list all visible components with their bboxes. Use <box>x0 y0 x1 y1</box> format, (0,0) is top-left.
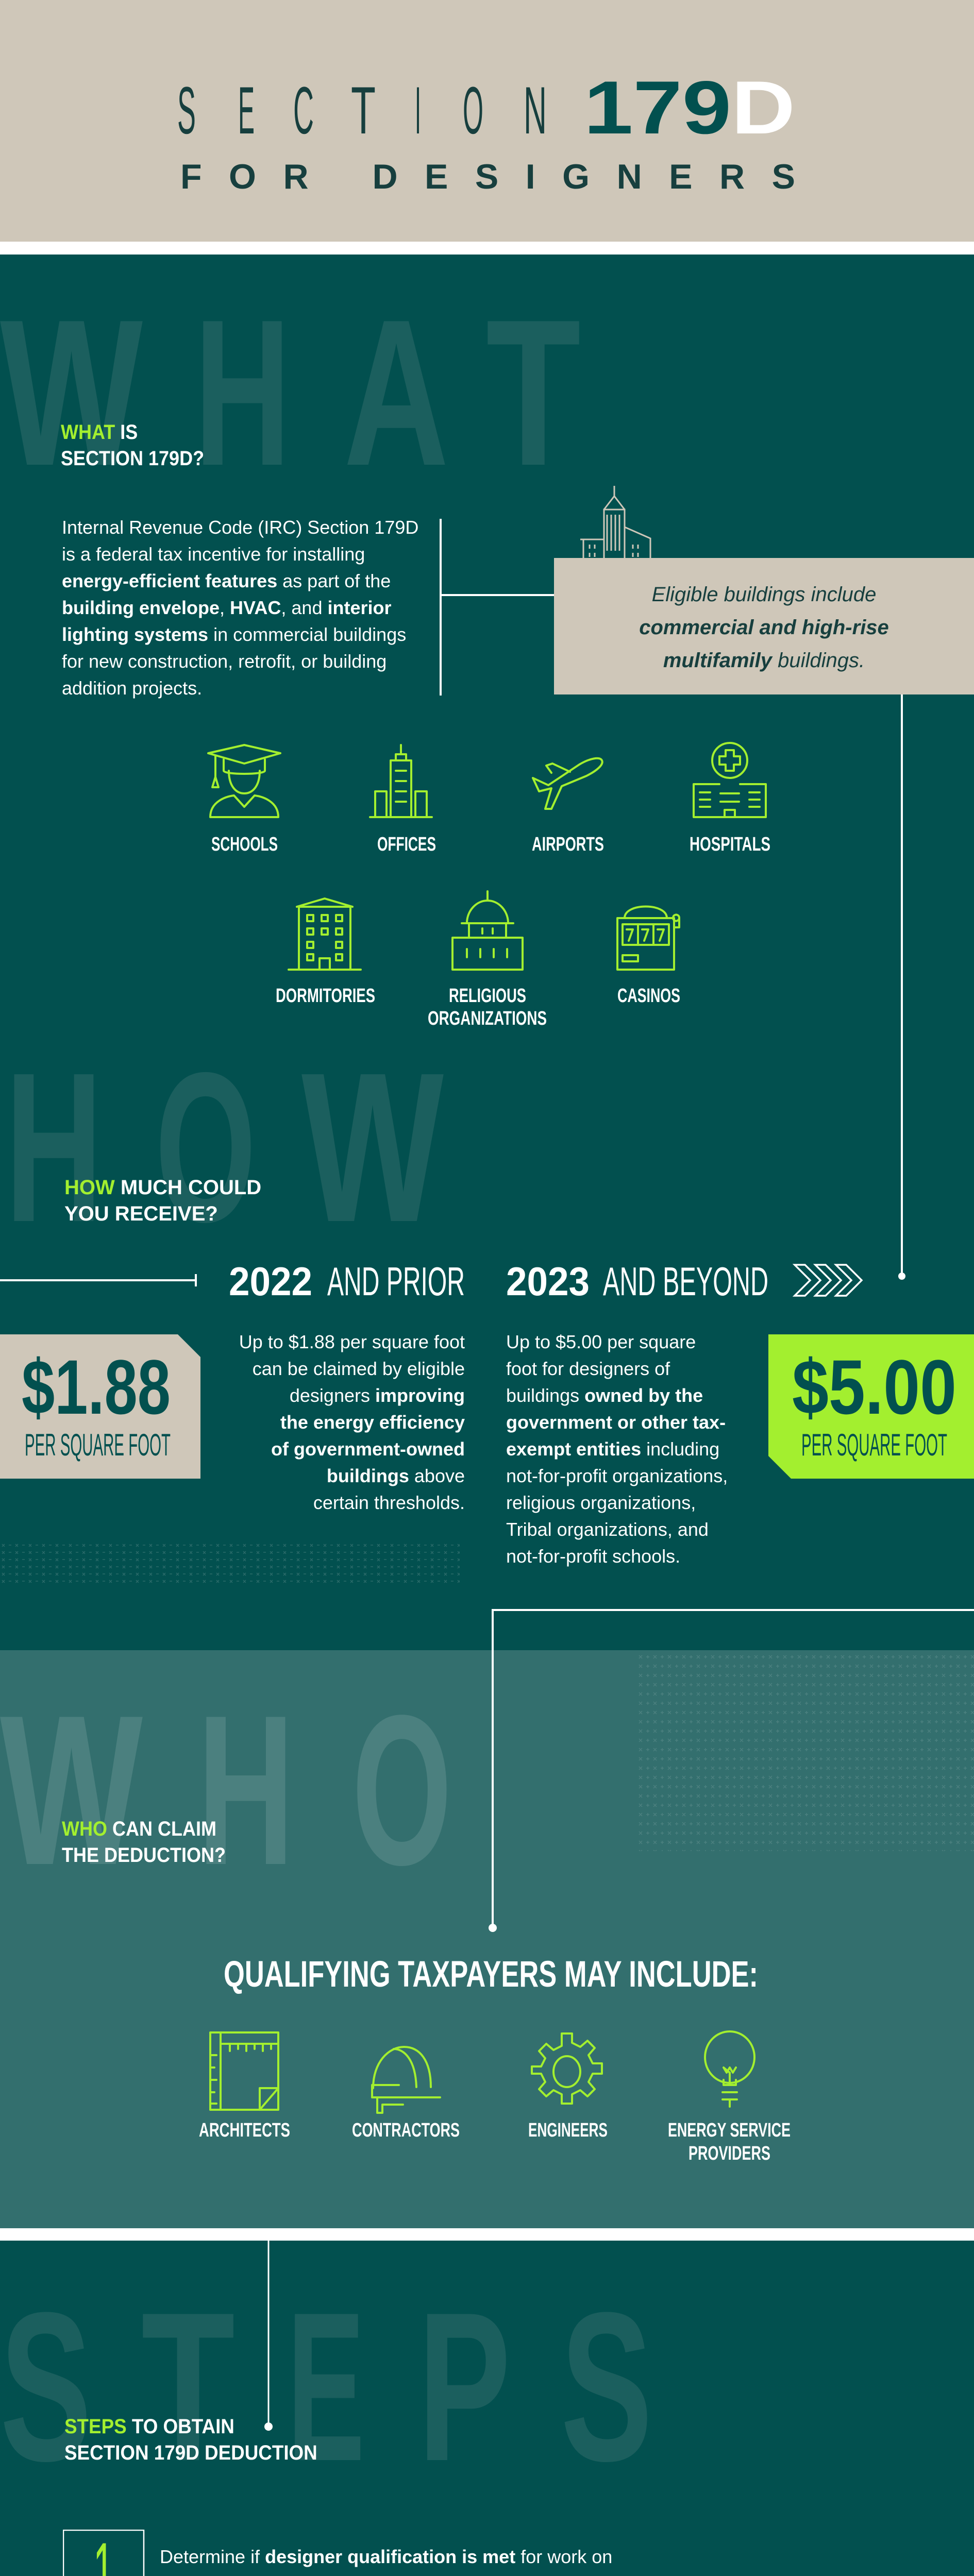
text: 2023 and beyond: not-for-profit organizations, <box>506 1465 728 1486</box>
icon: hospitals: HOSPITALS <box>690 834 770 855</box>
icon: hospitals <box>690 743 770 855</box>
title: E <box>238 73 255 148</box>
connector: how to who <box>489 1609 974 1932</box>
text: 2023 and beyond: government or other tax- <box>506 1412 726 1433</box>
text: what description <box>62 517 418 699</box>
icon: religious organizations: RELIGIOUS <box>449 985 526 1007</box>
text: 2022 and prior <box>239 1331 465 1513</box>
price tag: $5.00 <box>768 1334 974 1479</box>
icon: offices <box>370 745 436 855</box>
header band <box>0 0 974 242</box>
icon: airports <box>532 758 604 855</box>
icon: architects: ARCHITECTS <box>199 2120 290 2141</box>
timeline headings: 2022 and 2023: AND PRIOR <box>327 1259 465 1303</box>
icon: schools: SCHOOLS <box>211 834 278 855</box>
connector: who to steps <box>264 2241 273 2431</box>
text: 2022 and prior: can be claimed by eligible <box>253 1358 465 1379</box>
title: S <box>177 73 196 148</box>
pattern: how section dots <box>2 1544 460 1583</box>
heading: who can claim: THE DEDUCTION? <box>62 1844 226 1867</box>
icon: dormitories <box>276 899 375 1007</box>
heading: steps to obtain: STEPS TO OBTAIN <box>64 2415 234 2438</box>
text: 2023 and beyond: Up to $5.00 per square <box>506 1331 696 1352</box>
icon: engineers: ENGINEERS <box>528 2120 608 2141</box>
timeline headings: 2022 and 2023: 2023 <box>506 1259 590 1303</box>
icon grid: eligible building types <box>207 742 770 1029</box>
icon grid: taxpayers <box>199 2030 791 2164</box>
text: 2022 and prior: certain thresholds. <box>313 1492 465 1513</box>
title: FOR DESIGNERS <box>180 157 795 196</box>
timeline headings: 2022 and 2023: AND BEYOND <box>603 1259 768 1303</box>
text: 2022 and prior: the energy efficiency <box>280 1412 465 1433</box>
text: 2023 and beyond: religious organizations, <box>506 1492 696 1513</box>
connector lines: what to callout and down to how <box>440 519 905 1280</box>
heading: steps to obtain: SECTION 179D DEDUCTION <box>64 2442 317 2464</box>
text: what description: lighting systems in commercial buildings <box>62 624 406 645</box>
icon: airports: AIRPORTS <box>532 834 604 855</box>
watermark: WHO <box>0 1670 452 1872</box>
icon: contractors <box>352 2047 460 2141</box>
steps: numbered list <box>63 2530 612 2576</box>
heading: steps to obtain <box>64 2415 317 2464</box>
panel: who can claim <box>0 1650 974 2228</box>
heading: who can claim <box>62 1818 226 1867</box>
heading: how much could you receive <box>64 1176 261 1225</box>
icon: engineers <box>528 2033 608 2141</box>
step 1 <box>63 2530 612 2576</box>
icon: skyscraper outline <box>580 486 651 558</box>
callout: eligible buildings <box>554 558 974 694</box>
step connectors <box>0 2524 515 2576</box>
text: 2023 and beyond <box>506 1331 728 1567</box>
watermark: WHAT <box>0 276 581 469</box>
heading: what is section 179D <box>61 421 204 470</box>
title: I <box>415 73 421 148</box>
callout: eligible buildings: commercial and high-rise <box>639 616 889 639</box>
icon: dormitories: DORMITORIES <box>276 985 375 1007</box>
title: T <box>351 73 376 148</box>
text: 2022 and prior: Up to $1.88 per square foot <box>239 1331 465 1352</box>
text: what description: is a federal tax incentive for installing <box>62 544 365 565</box>
text: what description: energy-efficient features as part of the <box>62 570 391 591</box>
text: 2023 and beyond: exempt entities including <box>506 1438 719 1460</box>
icon: casinos <box>617 907 680 1007</box>
text: what description: Internal Revenue Code (IRC) Section 179D <box>62 517 418 538</box>
watermark: STEPS <box>0 2268 652 2468</box>
watermark: HOW <box>5 1030 445 1226</box>
pattern: crosses <box>639 1655 974 1851</box>
text: what description: addition projects. <box>62 677 202 699</box>
timeline headings: 2022 and 2023 <box>0 1259 863 1303</box>
icon: energy service providers: ENERGY SERVICE <box>668 2120 791 2141</box>
icon: energy service providers: PROVIDERS <box>688 2143 770 2164</box>
icon: architects <box>199 2032 290 2141</box>
title: 179 D <box>584 65 795 149</box>
heading: qualifying taxpayers: QUALIFYING TAXPAYERS MAY INCLUDE: <box>224 1954 758 1995</box>
timeline headings: 2022 and 2023: 2022 <box>229 1259 312 1303</box>
text: 2023 and beyond: foot for designers of <box>506 1358 670 1379</box>
icon: offices: OFFICES <box>377 834 436 855</box>
title: O <box>463 73 483 148</box>
price tag: $1.88 <box>0 1334 200 1479</box>
text: 2022 and prior: buildings above <box>327 1465 465 1486</box>
callout: eligible buildings: Eligible buildings include <box>652 583 876 606</box>
text: what description: building envelope, HVAC, and interior <box>62 597 391 618</box>
step 1: Determine if designer qualification is met for work on <box>160 2546 612 2567</box>
callout: eligible buildings: multifamily buildings. <box>663 649 865 672</box>
text: 2022 and prior: of government-owned <box>271 1438 465 1460</box>
heading: what is section 179D: WHAT IS <box>61 421 138 444</box>
icon: religious organizations <box>428 891 547 1029</box>
text: 2022 and prior: designers improving <box>290 1385 465 1406</box>
icon: casinos: CASINOS <box>617 985 680 1007</box>
heading: who can claim: WHO CAN CLAIM <box>62 1818 216 1840</box>
text: 2023 and beyond: buildings owned by the <box>506 1385 703 1406</box>
heading: how much could you receive: HOW MUCH COULD <box>64 1176 261 1199</box>
icon: schools <box>208 745 280 855</box>
icon: religious organizations: ORGANIZATIONS <box>428 1008 547 1029</box>
title <box>177 65 795 196</box>
title: C <box>293 73 314 148</box>
icon: energy service providers <box>668 2031 791 2164</box>
heading: what is section 179D: SECTION 179D? <box>61 447 204 470</box>
title: N <box>524 73 547 148</box>
text: 2023 and beyond: Tribal organizations, and <box>506 1519 709 1540</box>
icon: contractors: CONTRACTORS <box>352 2120 460 2141</box>
icon: chevrons <box>795 1265 862 1296</box>
text: what description: for new construction, retrofit, or building <box>62 651 387 672</box>
heading: how much could you receive: YOU RECEIVE? <box>64 1202 218 1225</box>
text: 2023 and beyond: not-for-profit schools. <box>506 1546 680 1567</box>
